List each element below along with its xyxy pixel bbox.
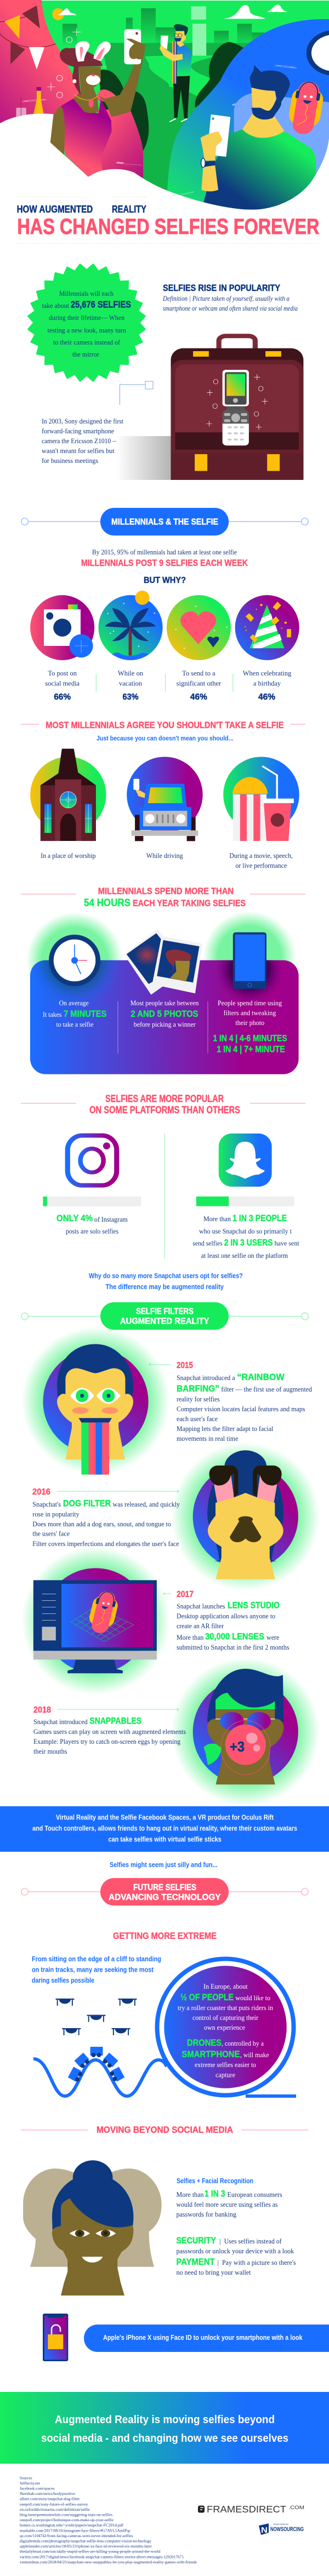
clouds [224,4,288,19]
text block: sources: en.oxforddictionaries.com/definition/selfie [20,2508,90,2512]
text: selfies and facial recognition: Uses selfies instead of [224,2237,282,2245]
callout: silly and fun: Selfies might seem just silly and fun... [110,1861,217,1869]
text: 2015 rainbow barfing: 2015 [177,1361,193,1370]
text: 2017 lens studio: were [266,1634,280,1641]
text: selfies and facial recognition: passwords for banking [177,2211,237,2218]
decorative letter E: E [83,60,109,69]
icon: vacation palm [98,591,163,661]
text: selfies and facial recognition: | [219,2237,221,2245]
title: REALITY [112,204,146,215]
table drink cup [16,96,26,117]
text: selfies and facial recognition: Pay with a picture so there's [222,2259,296,2266]
text: roller coaster drones: extreme selfies easier to [195,2061,256,2069]
text: 2015 rainbow barfing: reality for selfies [177,1395,220,1403]
reason: birthday: When celebrating [243,669,292,677]
icon: car [127,757,203,841]
text block: sources: facebook.com/spaces [20,2486,55,2491]
labels: where not to take a selfie: In a place of worship [41,852,95,860]
text: 2015 rainbow barfing: BARFING” [177,1383,219,1394]
text: 2016 dog filter: rose in popularity [32,1510,80,1518]
callout: why snapchat: Why do so many more Snapchat users opt for selfies? [89,1272,243,1280]
text: 2016 dog filter: Snapchat's [32,1501,61,1508]
icon: photos [124,929,202,995]
panel: 25,676 selfies starburst: the mirror [72,351,100,358]
text: 2018 snappables: Example: Players try to catch on-screen eggs by opening [33,1738,181,1745]
text: daring selfies: From sitting on the edge of a cliff to standing [32,1955,161,1963]
panel: 25,676 selfies starburst: during their lifetime— When [49,314,125,322]
reason: social media: social media [45,680,80,688]
text block: selfies rise in popularity [162,283,298,312]
callout: iPhone X Face ID: Apple's iPhone X using Face ID to unlock your smartphone with a look [103,2334,303,2342]
text: filters and tweaking: 1 IN 4 | 7+ MINUTE [217,1045,285,1055]
logo: FramesDirect: FRAMESDIRECT [207,2504,286,2515]
text: roller coaster drones: control of capturing their [192,2014,259,2022]
heading: moving beyond social media: MOVING BEYOND SOCIAL MEDIA [97,2125,233,2135]
text: snapchat stat: 1 IN 3 PEOPLE [232,1213,287,1223]
labels: where not to take a selfie [41,852,293,869]
icon: heart [167,595,231,660]
text block: Sony 2003 [42,417,132,465]
text: 2018 snappables: their mouths [33,1748,67,1755]
text block: sources: allure.com/story/snapchat-dog-filter [20,2497,80,2501]
reason: significant other [177,669,222,702]
heading: most millennials agree: MOST MILLENNIALS AGREE YOU SHOULDN'T TAKE A SELFIE [46,720,283,730]
text: daring selfies [32,1955,161,1984]
text: 2018 snappables [33,1705,186,1755]
text: instagram stat: posts are solo selfies [66,1228,118,1235]
text: 2015 rainbow barfing: filter — the first use of augmented [221,1386,313,1393]
heading pill: millennials and the selfie [21,508,308,536]
heading pill: future selfies: ADVANCING TECHNOLOGY [109,1893,221,1902]
text block: sources: thedailybeast.com/suicidally-stupid-selfies-are-killing-young-people-around-the-world [20,2550,161,2554]
heading: selfies by platform: SELFIES ARE MORE POPULAR [105,1094,224,1104]
callout: why snapchat [89,1272,243,1291]
labels: where not to take a selfie: or live performance [235,862,287,869]
bar: instagram 4% [43,1197,141,1206]
reason: vacation: While on [118,669,144,677]
text: 2015 rainbow barfing: Computer vision locates facial features and maps [177,1405,305,1413]
decorative letter i [191,7,206,56]
callout: why snapchat: The difference may be augmented reality [105,1283,224,1291]
text block: millennials post 9 selfies: By 2015, 95% of millennials had taken at least one selfie [92,548,237,556]
decorative letter O [309,32,329,73]
text: 2018 snappables: SNAPPABLES [89,1716,141,1726]
text block: millennials post 9 selfies: BUT WHY? [144,576,186,585]
text: 2018 snappables: Snapchat introduced [33,1718,88,1726]
heading pill: future selfies [21,1878,308,1905]
illustration: lens studio monitor [21,1547,170,1695]
text: snapchat stat: 2 IN 3 USERS [224,1238,273,1248]
labels: where not to take a selfie: While driving [146,852,183,860]
text: 7 minutes: to take a selfie [56,1021,94,1028]
heading: most millennials agree [21,720,305,742]
heading pill: selfie filters: AUGMENTED REALITY [120,1317,209,1326]
text: 2016 dog filter: the users' face [32,1530,70,1537]
icon: church [30,749,106,841]
icon: instagram [67,1136,117,1186]
text: snapchat stat [192,1213,299,1260]
text: snapchat stat: who use Snapchat do so primarily t [199,1228,292,1235]
text: 2017 lens studio: Desktop application allows anyone to [177,1612,275,1620]
panel: virtual reality band [0,1806,329,1852]
reason: vacation: 63% [123,692,138,702]
sun and small cloud [52,8,78,20]
reason: significant other: significant other [177,680,222,688]
heading pill: millennials and the selfie: MILLENNIALS & THE SELFIE [111,517,218,526]
icon: clock [49,935,100,986]
bottle [33,87,44,114]
text: 2017 lens studio: More than [177,1634,204,1641]
text: selfies and facial recognition: would feel more secure using selfies as [177,2201,278,2208]
text block: sources: mashable.com/2017/08/16/instagram-face-filters/#G7AYL5AmIPqc [20,2528,131,2533]
heading pill: future selfies: FUTURE SELFIES [133,1883,196,1892]
icon: party hat [235,595,299,660]
icon: snapchat [219,1134,272,1187]
text: 2015 rainbow barfing: “RAINBOW [237,1372,285,1382]
text: 2015 rainbow barfing: Snapchat introduced a [177,1374,235,1382]
text: 2016 dog filter: DOG FILTER [63,1498,111,1509]
text: daring selfies: on train tracks, many are seeking the most [32,1966,154,1973]
text: filters and tweaking: filters and tweaking [224,1009,276,1017]
reason: birthday: a birthday [253,680,281,688]
panel: 25,676 selfies starburst [29,265,145,381]
text block: sources: qz.com/1104742/front-facing-cameras-were-never-intended-for-selfies [20,2534,133,2538]
decorative letter S right: S [273,64,299,70]
text: 2016 dog filter: Does more than add a dog ears, snout, and tongue to [32,1520,171,1528]
text block: sources: onepoll.com/project/feelunique-com-make-up-your-selfie [20,2518,114,2522]
panel: conclusion banner: Augmented Reality is moving selfies beyond [55,2414,275,2426]
pink party backdrop [0,0,84,151]
decorative letter S: S [19,98,49,103]
text: 2016 dog filter [32,1487,180,1548]
text: 2 and 5 photos [131,999,199,1028]
logo: NowSourcing: NOWSOURCING [270,2526,304,2533]
text block: sources: Sources [20,2476,32,2480]
background selfie man [160,24,192,122]
text: instagram stat [56,1213,128,1235]
text: snapchat stat: at least one selfie on the platform [201,1252,288,1260]
connector line [120,381,153,405]
text: selfies and facial recognition: More than [177,2191,204,2199]
text: 2017 lens studio: Snapchat launches [177,1602,225,1610]
illustration: snappables face [172,1658,320,1806]
text: selfies and facial recognition: Selfies + Facial Recognition [177,2177,253,2185]
reason: vacation: vacation [119,680,143,688]
text: roller coaster drones: ½ OF PEOPLE [180,1992,234,2002]
text: 7 minutes [43,999,106,1028]
heading: 54 hours each year: EACH YEAR TAKING SELFIES [133,898,246,908]
logo: NowSourcing: DEVELOPED BY [274,2523,289,2526]
reason: social media: To post on [48,669,77,677]
text: 7 minutes: On average [59,999,89,1007]
text block: sources: venturebeat.com/2018/04/25/snapchats-new-snappables-let-you-play-augmented-reality-games-with-friends [20,2560,197,2564]
text block: millennials post 9 selfies [81,548,248,585]
right dark tree [195,42,246,108]
heading pill: selfie filters: SELFIE FILTERS [136,1307,194,1316]
text block: sources: homes.cs.washington.edu/~yoshi/papers/snapchat-FC2014.pdf [20,2523,124,2528]
text: 2016 dog filter: 2016 [32,1487,50,1497]
panel: 25,676 selfies starburst: to their camera instead of [53,339,121,346]
text: roller coaster drones: DRONES [187,2037,222,2048]
hot dog character [289,81,324,134]
text: selfies and facial recognition: | [217,2259,219,2266]
callout: iPhone X Face ID [84,2325,329,2352]
panel: hero illustration [0,0,329,220]
panel: conclusion banner: social media - and changing how we see ourselves [41,2432,288,2445]
pink backdrop behind woman [88,110,143,180]
heading: most millennials agree: Just because you can doesn't mean you should... [97,735,234,742]
green park ground [101,43,273,219]
text block: Sony 2003: In 2003, Sony designed the first [42,417,123,425]
text: 2015 rainbow barfing [149,1361,313,1442]
text block: Sony 2003: for business meetings [42,457,98,465]
text: roller coaster drones: would like to [235,1994,270,2002]
illustration: rainbow barf filter face [21,1327,170,1475]
illustration: dog filter face [172,1442,320,1590]
reason labels and percentages [45,669,292,702]
text: selfies and facial recognition: no need to bring your wallet [177,2269,251,2276]
logo: FramesDirect: .COM [288,2505,304,2510]
decorative letter E right: E [229,98,257,107]
text: 2015 rainbow barfing: movements in real time [177,1435,239,1442]
logo: NowSourcing: N [261,2526,268,2535]
heading: getting more extreme: GETTING MORE EXTREME [113,1931,217,1941]
text block: Sony 2003: forward-facing smartphone [42,427,114,435]
panel: 25,676 selfies starburst: testing a new look, many turn [47,327,127,334]
briefcase shadow [116,436,171,480]
text block: sources: onepoll.com/sony-future-of-selfies-survey [20,2502,88,2506]
decorative letter F: F [168,190,199,199]
reason: significant other: 46% [190,692,207,702]
icon: roller coaster track [33,1959,296,2098]
text block: sources: Selfiecity.net [20,2481,40,2486]
reason: birthday [243,669,292,702]
text: roller coaster drones: In Europe, about [203,1983,248,1990]
text: 2016 dog filter: was released, and quickly [113,1501,180,1508]
label: +3 score: +3 [230,1738,245,1755]
text: selfies and facial recognition [177,2177,296,2276]
icon: drones [55,1999,137,2035]
text block: Sony 2003: camera the Ericsson Z1010 — it [42,437,124,445]
icon: social media camera [30,595,94,660]
text: 2 and 5 photos: 2 AND 5 PHOTOS [131,1009,198,1019]
text: 2018 snappables: Games users can play on screen with augmented elements [33,1728,186,1736]
text: selfies and facial recognition: European consumers [227,2191,282,2199]
panel: 25,676 selfies starburst: take about [42,302,70,310]
text: roller coaster drones [178,1983,274,2079]
panel: conclusion banner [0,2392,329,2464]
text block: Sony 2003: wasn't meant for selfies but rather [42,447,132,455]
city skyline [63,8,264,45]
party sparkles [47,28,81,98]
text: roller coaster drones: try a roller coaster that puts riders in [178,2004,274,2012]
panel: time spent taking selfies [26,911,299,1074]
text block: selfies rise in popularity: smartphone or webcam and often shared via social media [163,305,298,312]
icon: smartphone [233,932,266,989]
labels: where not to take a selfie: During a movie, speech, [229,852,293,860]
text: roller coaster drones: capture [215,2071,235,2079]
text: 2017 lens studio: submitted to Snapchat in the first 2 months [177,1644,290,1651]
panel: platforms icons and bars [43,1134,294,1206]
reason: birthday: 46% [258,692,275,702]
reason: vacation [118,669,144,702]
woman figure [50,29,145,176]
text: 2017 lens studio: 2017 [177,1590,194,1599]
decorative letter L: L [113,161,146,166]
green background [0,1,329,220]
text: filters and tweaking [213,999,287,1055]
icon: popcorn and drink [223,757,299,841]
panel: virtual reality band: can take selfies with virtual selfie sticks [109,1836,222,1844]
heading: selfies by platform: ON SOME PLATFORMS THAN OTHERS [89,1104,240,1115]
panel: 25,676 selfies starburst: Millennials will each [59,290,114,297]
text: 2016 dog filter: Filter covers imperfections and elongates the user's face [32,1540,179,1548]
text: roller coaster drones: SMARTPHONE [181,2049,240,2059]
foreground man [200,65,329,212]
text: instagram stat: ONLY 4% [56,1213,93,1223]
text: 2018 snappables: 2018 [33,1705,51,1715]
heading pill: selfie filters [21,1302,308,1330]
heading: 54 hours each year: 54 HOURS [84,897,131,909]
reason: social media [45,669,80,702]
text: roller coaster drones: own experience [204,2024,245,2031]
text: snapchat stat: More than [203,1215,231,1223]
text: 2017 lens studio: LENS STUDIO [228,1600,280,1611]
text: filters and tweaking: their photo [235,1019,264,1027]
heading: 54 hours each year: MILLENNIALS SPEND MORE THAN [98,886,234,896]
reason: social media: 66% [54,692,71,702]
text block: selfies rise in popularity: SELFIES RISE IN POPULARITY [163,283,280,293]
title [17,197,319,243]
text block: sources: digitaltrends.com/photography/snapchat-selfie-lens-computer-vision-technology [20,2539,152,2543]
text: snapchat stat: send selfies [192,1240,223,1247]
title: HOW AUGMENTED [17,204,93,215]
text: selfies and facial recognition: 1 IN 3 [205,2188,225,2199]
bunting flags [0,5,55,70]
panel: virtual reality band: and Touch controllers, allows friends to hang out in virtual reality, where their custom avatars [32,1825,297,1833]
blue background [167,19,329,219]
text: filters and tweaking: People spend time using [218,999,282,1007]
heading: selfies by platform [21,1094,305,1115]
illustration: face recognition woman [23,2160,162,2295]
text: 2017 lens studio [163,1590,290,1651]
text: 2015 rainbow barfing: Mapping lets the filter adapt to facial [177,1425,274,1433]
text: 2 and 5 photos: Most people take between [131,999,199,1007]
icons row: reasons for selfies [30,591,299,661]
panel: 25,676 selfies starburst: 25,676 SELFIES [71,299,131,310]
text: 7 minutes: It takes [43,1011,62,1018]
text: selfies and facial recognition: PAYMENT [177,2257,215,2267]
text block: selfies rise in popularity: Definition | Picture taken of yourself, usually with a [162,295,290,302]
logo: NowSourcing [259,2523,304,2535]
text block: sources: appleinsider.com/articles/18/05/23/iphone-xs-face-id-reviewed-six-months-later [20,2544,152,2549]
heading: 54 hours each year [21,886,305,909]
left dark tree [99,70,149,152]
text: selfies and facial recognition: passwords or unlock your device with a look [177,2247,294,2255]
bar: snapchat 1 in 3 [196,1197,294,1206]
text: 2017 lens studio: 30,000 LENSES [205,1632,264,1641]
text: 2017 lens studio: create an AR filter [177,1622,224,1630]
text: daring selfies: daring selfies possible [32,1977,94,1984]
text block: sources [20,2476,197,2564]
icons row: where not to take a selfie [30,749,299,841]
text: selfies and facial recognition: SECURITY [177,2235,217,2246]
text: instagram stat: of Instagram [94,1216,128,1223]
reason: significant other: To send to a [182,669,215,677]
icon: briefcase with flip phone [171,336,303,480]
text: 2015 rainbow barfing: each user's face [177,1415,218,1423]
text: filters and tweaking: 1 IN 4 | 4-6 MINUTES [213,1034,287,1044]
text: 7 minutes: 7 MINUTES [64,1009,106,1019]
panel: virtual reality band: Virtual Reality and the Selfie Facebook Spaces, a VR product for Oculus Rift [56,1814,274,1822]
text block: sources: fherehab.com/news/bodypositive [20,2492,75,2496]
text: 2 and 5 photos: before picking a winner [134,1021,196,1028]
text: snapchat stat: have sent [275,1240,299,1247]
icon: unlocked iPhone [43,2314,68,2361]
light green river path [145,55,213,96]
text: roller coaster drones: , will make [240,2051,269,2059]
text block: sources: variety.com/2017/digital/news/facebook-snapchat-camera-filters-stories-direct-messages-1202017671 [20,2555,184,2559]
text: roller coaster drones: , controlled by a [222,2040,264,2047]
text block: millennials post 9 selfies: MILLENNIALS POST 9 SELFIES EACH WEEK [81,558,248,568]
text block: sources: blog.lusterpremiumwhite.com/staggering-stats-on-selfies [20,2512,112,2517]
